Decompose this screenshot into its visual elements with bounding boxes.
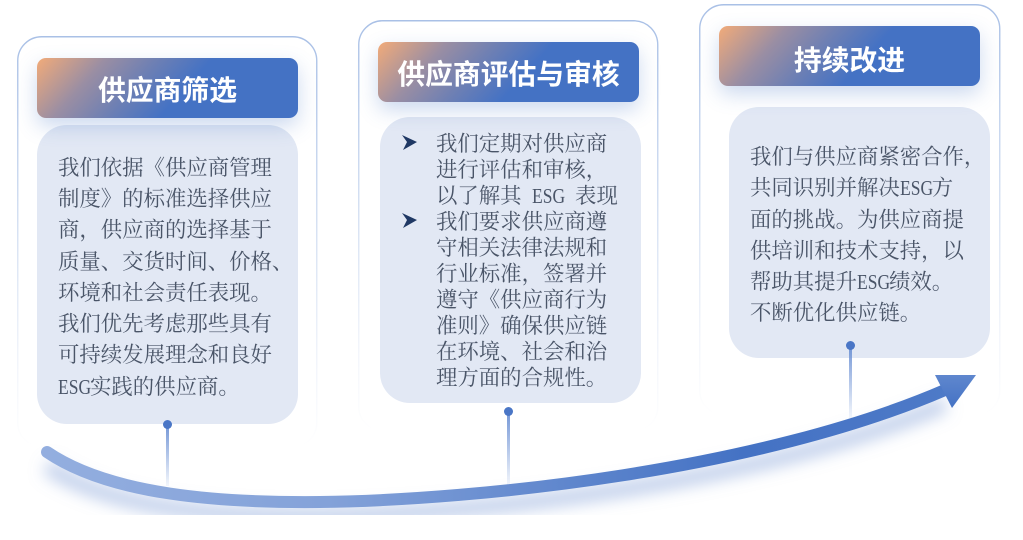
text block: improvement description: 不断优化供应链。 bbox=[750, 301, 921, 325]
text block: evaluation bullets: 我们定期对供应商 bbox=[436, 132, 607, 156]
text block: evaluation bullets: 遵守《供应商行为 bbox=[436, 288, 607, 312]
text block: improvement description: 共同识别并解决 方 bbox=[750, 176, 953, 200]
text block: improvement description: 我们与供应商紧密合作， bbox=[750, 145, 985, 169]
panel: supplier screening bbox=[17, 36, 318, 424]
icon: bullet arrow bbox=[402, 213, 417, 228]
text block: improvement description: ESG bbox=[857, 270, 890, 294]
text block: improvement description: 面的挑战。为供应商提 bbox=[750, 208, 964, 232]
text block: evaluation bullets: ESG bbox=[532, 184, 565, 208]
panel: supplier evaluation and audit bbox=[358, 20, 658, 403]
connector: step one stem bbox=[163, 420, 172, 486]
text block: screening description: 我们依据《供应商管理 bbox=[58, 156, 272, 180]
connector: step two stem bbox=[504, 407, 513, 484]
heading: supplier evaluation and audit bbox=[378, 42, 639, 102]
text block: evaluation bullets bbox=[380, 117, 641, 403]
text block: improvement description: 帮助其提升 绩效。 bbox=[750, 270, 953, 294]
heading: continuous improvement: 持续改进 bbox=[794, 45, 905, 76]
arrow: rising progress curve bbox=[39, 375, 976, 515]
text block: evaluation bullets: 以了解其 表现 bbox=[436, 184, 618, 208]
text block: screening description: 环境和社会责任表现。 bbox=[58, 281, 272, 305]
text block: improvement description: 供培训和技术支持，以 bbox=[750, 239, 964, 263]
text block: screening description: 我们优先考虑那些具有 bbox=[58, 312, 272, 336]
heading: supplier screening: 供应商筛选 bbox=[98, 75, 237, 106]
text block: screening description: 实践的供应商。 bbox=[90, 375, 240, 399]
heading: supplier evaluation and audit: 供应商评估与审核 bbox=[397, 59, 620, 90]
text block: improvement description: ESG bbox=[900, 176, 933, 200]
text block: screening description: ESG bbox=[58, 375, 91, 399]
text block: evaluation bullets: 在环境、社会和治 bbox=[436, 340, 607, 364]
text block: screening description: 可持续发展理念和良好 bbox=[58, 343, 272, 367]
heading: continuous improvement bbox=[719, 26, 980, 86]
text block: screening description: 商，供应商的选择基于 bbox=[58, 218, 272, 242]
text block: screening description: 质量、交货时间、价格、 bbox=[58, 250, 293, 274]
text block: improvement description bbox=[729, 107, 990, 358]
text block: screening description: 制度》的标准选择供应 bbox=[58, 187, 272, 211]
heading: supplier screening bbox=[37, 58, 298, 118]
text block: evaluation bullets: 我们要求供应商遵 bbox=[436, 210, 607, 234]
text block: evaluation bullets: 准则》确保供应链 bbox=[436, 314, 607, 338]
panel: continuous improvement bbox=[699, 4, 1000, 362]
connector: step three stem bbox=[846, 341, 855, 418]
icon: bullet arrow bbox=[402, 135, 417, 150]
text block: evaluation bullets: 守相关法律法规和 bbox=[436, 236, 607, 260]
text block: screening description bbox=[37, 125, 298, 424]
text block: evaluation bullets: 理方面的合规性。 bbox=[436, 366, 607, 390]
text block: evaluation bullets: 进行评估和审核， bbox=[436, 158, 607, 182]
text block: evaluation bullets: 行业标准，签署并 bbox=[436, 262, 607, 286]
